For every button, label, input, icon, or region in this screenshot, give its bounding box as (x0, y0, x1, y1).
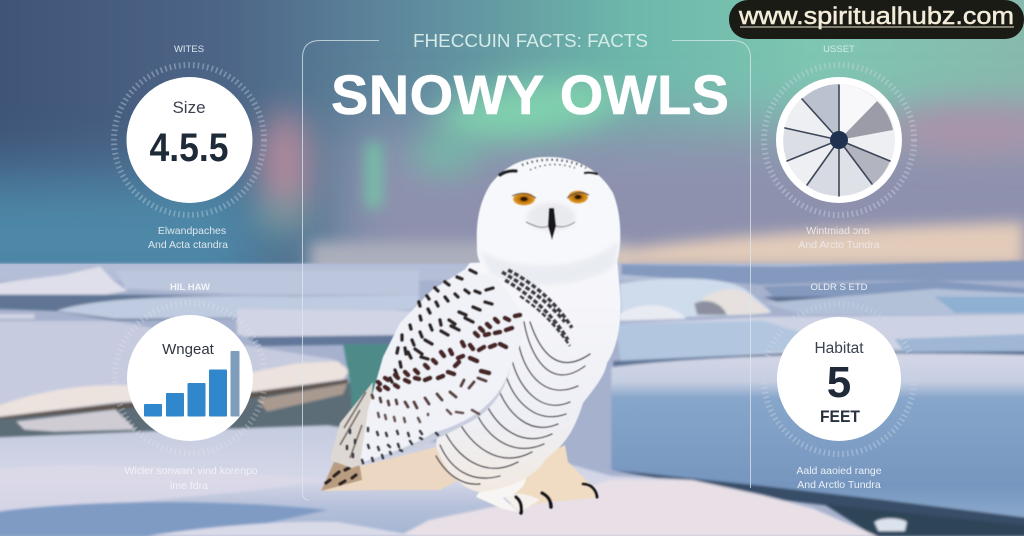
weight disc (127, 315, 253, 441)
panel: weight (115, 282, 265, 492)
title: SNOWY OWLS (331, 63, 729, 126)
tick ring (114, 65, 264, 215)
owl primaries (330, 382, 373, 468)
habitat value: 5 (827, 358, 851, 407)
website badge (729, 0, 1024, 39)
bar chart (144, 351, 240, 416)
size label: Size (172, 98, 206, 117)
habitat caption line 2: And Arctlo Tundra (797, 479, 881, 491)
distant bands (0, 264, 1024, 281)
owl face shading (527, 203, 575, 231)
owl crown speckles (522, 160, 586, 170)
subtitle: FHECCUIN FACTS: FACTS (413, 30, 648, 51)
label: wites: WITES (174, 44, 204, 55)
background: ice field (0, 261, 1024, 536)
tick ring (764, 304, 914, 454)
background: aurora sky (0, 0, 1024, 264)
owl eyes (512, 190, 589, 206)
wheel caption: Wintmiad ɔnɒ (806, 225, 870, 237)
size value: 4.5.5 (150, 126, 228, 170)
tick ring (115, 303, 265, 453)
size disc (126, 77, 252, 203)
panel: wheel (764, 44, 914, 251)
owl neck speckled patch (502, 270, 572, 346)
owl body (436, 258, 621, 492)
right long floe (615, 315, 1024, 363)
owl tail (321, 446, 462, 491)
label: hil haw: HIL HAW (170, 282, 210, 293)
owl breast barring (436, 322, 590, 484)
right big field (611, 354, 1024, 518)
size caption: Elwandpaches (158, 225, 226, 237)
label: usset: USSET (823, 44, 855, 55)
habitat caption: Aald aaoied range (796, 465, 882, 477)
owl wing (360, 268, 523, 463)
habitat disc (777, 317, 901, 441)
website badge: www.spiritualhubz.com (738, 3, 1014, 30)
size caption line 2: And Acta ctandra (148, 239, 228, 251)
left big floe (0, 321, 349, 418)
foreground snow (0, 426, 877, 536)
habitat label: Habitat (814, 340, 864, 357)
owl talons (516, 484, 597, 513)
wheel caption line 2: And Arcto Tundra (798, 239, 880, 251)
habitat unit: FEET (820, 408, 860, 426)
wheel chart (783, 84, 895, 196)
label: olders etd: OLDR S ETD (810, 282, 868, 293)
water (0, 354, 399, 438)
tick ring (764, 65, 914, 215)
panel: size (114, 44, 264, 251)
frame around title (302, 40, 750, 500)
panel: habitat (764, 282, 914, 491)
owl wing markings (347, 270, 520, 463)
weight caption line 2: ime fdra (170, 480, 208, 492)
snowy owl illustration (321, 157, 621, 513)
owl beak (548, 208, 556, 240)
weight label: Wngeat (162, 341, 215, 358)
weight caption: Wicler sonwan' vind korenpo (124, 465, 258, 477)
wheel disc (776, 77, 902, 203)
owl legs (510, 445, 597, 510)
right distant floes (763, 281, 1024, 299)
owl head (477, 157, 620, 286)
